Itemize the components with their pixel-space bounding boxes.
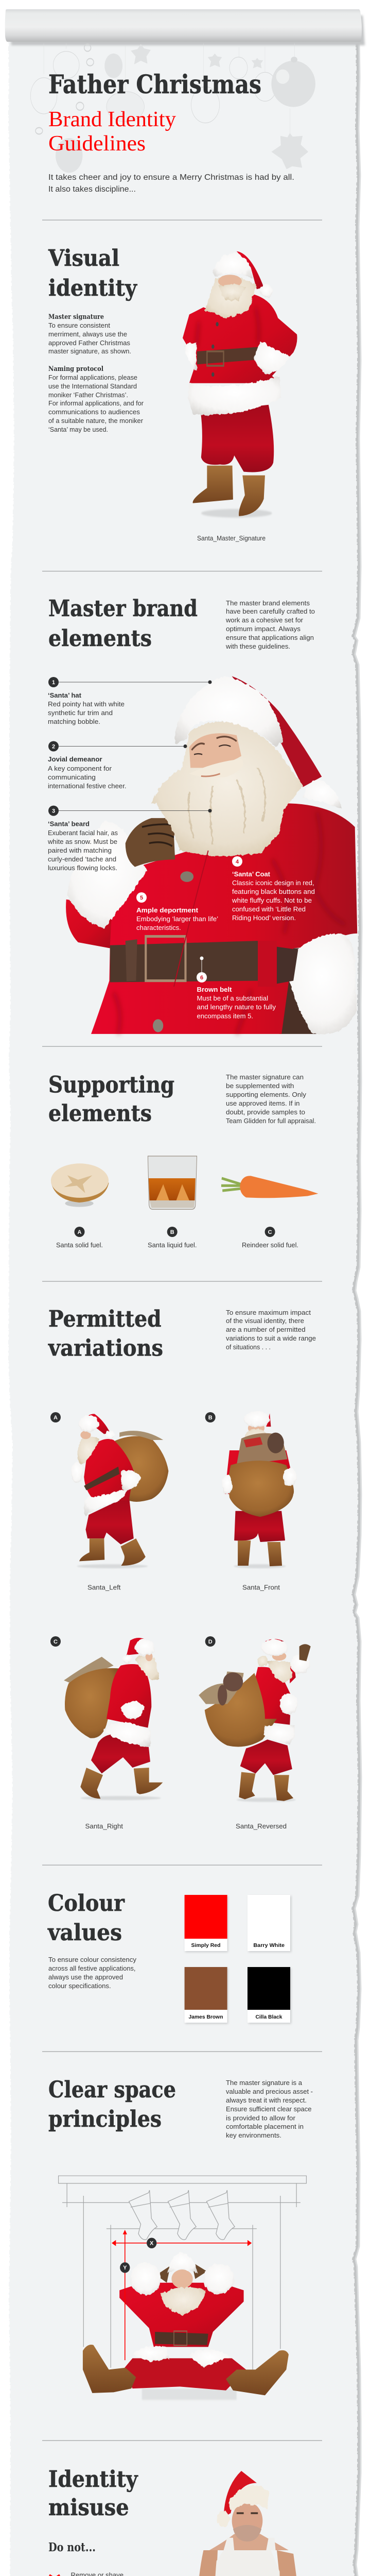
callout 4: coat: Classic iconic design in red, xyxy=(232,879,314,887)
naming protocol copy: of a suitable nature, the moniker xyxy=(48,417,144,425)
intro copy: be supplemented with xyxy=(226,1082,294,1090)
intro copy: of the visual identity, there xyxy=(226,1317,304,1325)
heading: Colour xyxy=(48,1890,125,1917)
heading xyxy=(47,1890,125,1946)
axis labels xyxy=(123,2240,154,2271)
heading: Visual xyxy=(48,245,119,272)
heading xyxy=(48,596,198,652)
do not heading: Do not... xyxy=(48,2540,96,2554)
intro copy: work as a cohesive set for xyxy=(225,616,304,624)
subtitle: Brand Identity xyxy=(48,108,176,131)
callout 4: coat: 4 xyxy=(236,859,239,865)
callout 4: coat: ‘Santa’ Coat xyxy=(232,870,271,878)
callout 3: beard xyxy=(47,806,212,872)
callout 3: beard: white as snow. Must be xyxy=(47,838,117,845)
copy: is provided to allow for xyxy=(226,2114,296,2122)
variation A: santa left xyxy=(50,1412,168,1568)
section: visual identity xyxy=(48,245,297,542)
icon: mince pie xyxy=(51,1163,109,1207)
item labels: Santa solid fuel. xyxy=(56,1241,103,1249)
section: clear space principles xyxy=(48,2077,313,2400)
intro copy: of situations . . . xyxy=(226,1343,271,1351)
callout 3: beard: luxurious flowing locks. xyxy=(48,864,117,872)
variation C: santa right xyxy=(50,1636,163,1800)
swatch: barry white xyxy=(248,1895,291,1952)
icon: carrot xyxy=(221,1176,318,1198)
variation A: santa left: A xyxy=(54,1415,58,1421)
captions A and B: Santa_Left xyxy=(87,1584,121,1591)
copy: always use the approved xyxy=(48,1973,123,1981)
item labels: B xyxy=(170,1229,174,1235)
heading: elements xyxy=(48,625,152,652)
intro copy: use approved items. If in xyxy=(226,1099,299,1107)
naming protocol copy: For formal applications, please xyxy=(48,374,137,381)
captions A and B xyxy=(87,1584,280,1591)
fireplace sketch xyxy=(59,2176,306,2369)
heading: Identity xyxy=(48,2466,138,2493)
swatch: cilla black xyxy=(248,1967,291,2024)
intro copy: variations to suit a wide range xyxy=(226,1334,316,1342)
fireplace diagram xyxy=(59,2176,306,2400)
copy: always treat it with respect. xyxy=(226,2096,307,2104)
swatch: james brown xyxy=(185,1967,228,2024)
section: permitted variations xyxy=(48,1306,316,1830)
intro copy xyxy=(225,599,315,650)
callout 3: beard: 3 xyxy=(52,808,55,815)
captions C and D: Santa_Right xyxy=(85,1822,123,1830)
callout 3: beard: Exuberant facial hair, as xyxy=(48,829,118,837)
copy xyxy=(226,2079,313,2139)
heading xyxy=(48,1306,163,1361)
naming protocol copy: communications to audiences xyxy=(48,408,140,416)
copy: The master signature is a xyxy=(226,2079,303,2087)
intro copy: The master brand elements xyxy=(226,599,310,607)
swatch: simply red: Simply Red xyxy=(191,1943,220,1948)
callout 3: beard: curly-ended ‘tache and xyxy=(48,855,116,863)
heading: misuse xyxy=(48,2495,129,2521)
heading: Supporting xyxy=(48,1072,174,1098)
copy: key environments. xyxy=(226,2131,281,2139)
copy xyxy=(48,1956,136,1990)
top paper roll xyxy=(5,9,365,45)
intro copy: have been carefully crafted to xyxy=(226,607,315,615)
intro copy: ensure that applications align xyxy=(226,634,314,641)
callout 2: demeanor: 2 xyxy=(52,744,55,750)
intro text: It takes cheer and joy to ensure a Merry Christmas is had by all. xyxy=(48,173,294,182)
callout 5: deportment: 5 xyxy=(140,895,143,901)
large santa photo xyxy=(66,676,357,1034)
section dividers xyxy=(42,219,322,2576)
heading: principles xyxy=(48,2106,162,2132)
section: identity misuse xyxy=(48,2466,301,2576)
copy: across all festive applications, xyxy=(48,1964,136,1972)
callout 3: beard: ‘Santa’ beard xyxy=(48,820,90,827)
callout 1: hat: synthetic fur trim and xyxy=(48,709,113,717)
santa master signature figure xyxy=(183,251,297,518)
main title: Father Christmas xyxy=(48,69,261,99)
intro copy xyxy=(226,1309,316,1351)
variation B: santa front: B xyxy=(208,1415,213,1421)
section: supporting elements xyxy=(48,1072,318,1249)
intro copy: doubt, provide samples to xyxy=(226,1108,305,1116)
copy: Ensure sufficient clear space xyxy=(226,2105,312,2113)
caption: Santa_Master_Signature xyxy=(197,535,266,542)
callout 4: coat: white fluffy cuffs. Not to be xyxy=(232,896,312,904)
heading xyxy=(48,2466,138,2521)
axis labels: Y xyxy=(123,2265,127,2271)
heading: values xyxy=(47,1920,122,1946)
callout 3: beard: paired with matching xyxy=(48,846,112,854)
naming protocol copy xyxy=(48,365,144,433)
callout 5: deportment: Ample deportment xyxy=(136,906,199,914)
callout 4: coat: confused with ‘Little Red xyxy=(232,905,306,913)
callout 1: hat: Red pointy hat with white xyxy=(48,700,125,708)
subtitle xyxy=(48,108,176,156)
item labels: Santa liquid fuel. xyxy=(148,1241,197,1249)
copy: To ensure colour consistency xyxy=(48,1956,136,1963)
heading xyxy=(48,245,137,301)
callout 5: deportment xyxy=(136,892,218,931)
swatch: james brown: James Brown xyxy=(188,2014,223,2020)
clear-space arrows xyxy=(112,2230,252,2360)
callout 2: demeanor: communicating xyxy=(48,773,96,781)
heading xyxy=(48,1072,174,1127)
variation C: santa right: C xyxy=(54,1639,58,1645)
callout 1: hat: 1 xyxy=(52,680,55,686)
heading: Master brand xyxy=(48,596,198,622)
copy: valuable and precious asset - xyxy=(226,2088,313,2095)
callout 2: demeanor: A key component for xyxy=(48,765,112,772)
callout 4: coat: featuring black buttons and xyxy=(232,888,315,895)
man in santa hat photo xyxy=(197,2471,301,2576)
heading xyxy=(48,2077,176,2132)
heading: Clear space xyxy=(48,2077,176,2103)
intro copy: To ensure maximum impact xyxy=(226,1309,311,1316)
naming protocol copy: For informal applications, and for xyxy=(48,399,144,407)
intro copy: are a number of permitted xyxy=(226,1326,306,1333)
callout 1: hat xyxy=(48,677,212,725)
callout 6: belt xyxy=(197,956,276,1020)
master signature copy: approved Father Christmas xyxy=(48,339,130,347)
callout 6: belt: Must be of a substantial xyxy=(197,994,268,1002)
axis labels: X xyxy=(150,2240,154,2246)
icon: whisky glass xyxy=(148,1156,197,1209)
callout 2: demeanor: international festive cheer. xyxy=(48,782,127,790)
swatch: simply red xyxy=(185,1895,228,1952)
intro copy xyxy=(226,1073,316,1125)
section: colour values xyxy=(47,1890,291,2024)
callout 5: deportment: characteristics. xyxy=(136,924,181,931)
intro copy: with these guidelines. xyxy=(225,642,290,650)
copy: comfortable placement in xyxy=(226,2123,304,2130)
swatch: cilla black: Cilla Black xyxy=(255,2014,282,2020)
heading: Permitted xyxy=(48,1306,162,1332)
misuse list xyxy=(49,2571,150,2576)
heading: variations xyxy=(48,1335,163,1361)
callout 2: demeanor xyxy=(48,741,187,790)
captions A and B: Santa_Front xyxy=(242,1584,280,1591)
master signature copy: master signature, as shown. xyxy=(48,347,131,355)
subtitle: Guidelines xyxy=(48,132,146,156)
callout 1: hat: ‘Santa’ hat xyxy=(48,691,82,699)
intro copy: Team Glidden for full appraisal. xyxy=(226,1117,316,1125)
intro text: It also takes discipline... xyxy=(48,185,136,194)
intro copy: supporting elements. Only xyxy=(226,1091,307,1098)
intro copy: The master signature can xyxy=(226,1073,304,1081)
item labels: Reindeer solid fuel. xyxy=(242,1241,298,1249)
master signature copy xyxy=(48,313,131,355)
callout 6: belt: 6 xyxy=(200,975,203,981)
heading: identity xyxy=(48,275,137,301)
intro copy: optimum impact. Always xyxy=(226,625,301,633)
callout 1: hat: matching bobble. xyxy=(48,718,100,725)
title block xyxy=(48,69,294,194)
background ornaments: top xyxy=(30,43,315,173)
callout 6: belt: Brown belt xyxy=(197,986,232,993)
item labels: C xyxy=(268,1229,272,1235)
item labels: A xyxy=(78,1229,82,1235)
intro text xyxy=(48,173,294,194)
callout 4: coat: Riding Hood’ version. xyxy=(232,914,296,922)
naming protocol copy: moniker ‘Father Christmas’. xyxy=(48,391,128,399)
naming protocol copy: ‘Santa’ may be used. xyxy=(48,426,108,433)
master signature copy: merriment, always use the xyxy=(48,330,127,338)
swatch: barry white: Barry White xyxy=(253,1943,285,1948)
callout 6: belt: encompass item 5. xyxy=(197,1012,253,1020)
variation D: santa reversed: D xyxy=(208,1639,213,1645)
callout 5: deportment: Embodying ‘larger than life’ xyxy=(136,915,218,923)
heading: elements xyxy=(48,1100,152,1127)
section: master brand elements xyxy=(47,596,357,1034)
copy: colour specifications. xyxy=(48,1982,111,1990)
variation D: santa reversed xyxy=(199,1636,311,1802)
master signature copy: To ensure consistent xyxy=(48,321,110,329)
captions C and D xyxy=(85,1822,287,1830)
callout 6: belt: and lengthy nature to fully xyxy=(197,1003,276,1011)
captions C and D: Santa_Reversed xyxy=(236,1822,287,1830)
master signature copy: Master signature xyxy=(48,313,104,321)
naming protocol copy: Naming protocol xyxy=(48,365,103,373)
sitting santa xyxy=(83,2252,289,2400)
callout 2: demeanor: Jovial demeanor xyxy=(48,755,102,763)
item labels xyxy=(56,1227,298,1249)
callout 4: coat xyxy=(232,856,315,922)
naming protocol copy: use the International Standard xyxy=(48,382,137,390)
variation B: santa front xyxy=(205,1412,296,1568)
